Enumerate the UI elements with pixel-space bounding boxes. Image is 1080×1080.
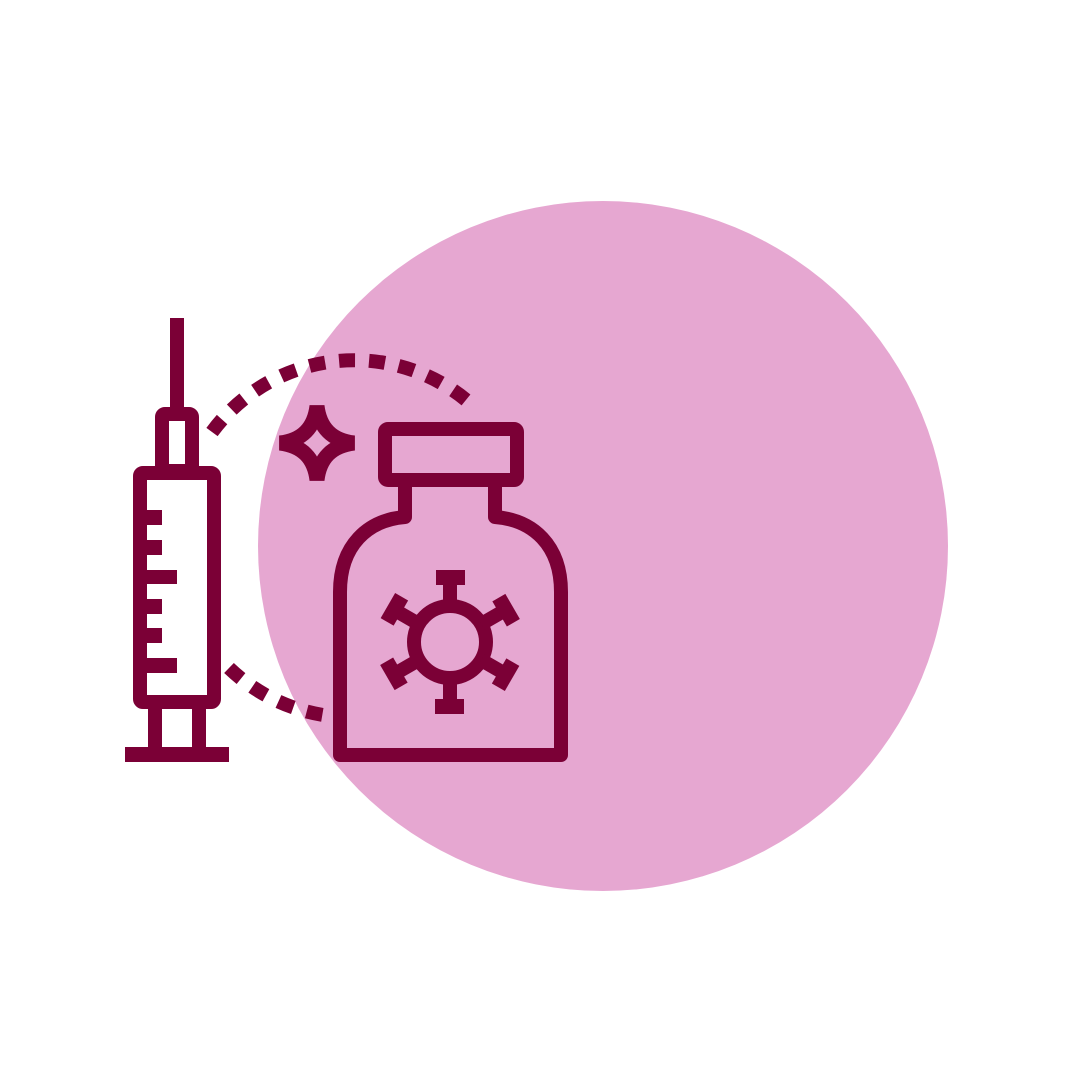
- arrow: upper dotted arc: [212, 360, 472, 432]
- icon: vaccine vial: [340, 429, 561, 755]
- icon: syringe: [125, 318, 229, 762]
- icon: sparkle: [280, 406, 354, 480]
- pink background circle: [258, 201, 948, 891]
- icon: virus: [380, 570, 520, 714]
- arrow: lower dotted arc: [229, 668, 323, 715]
